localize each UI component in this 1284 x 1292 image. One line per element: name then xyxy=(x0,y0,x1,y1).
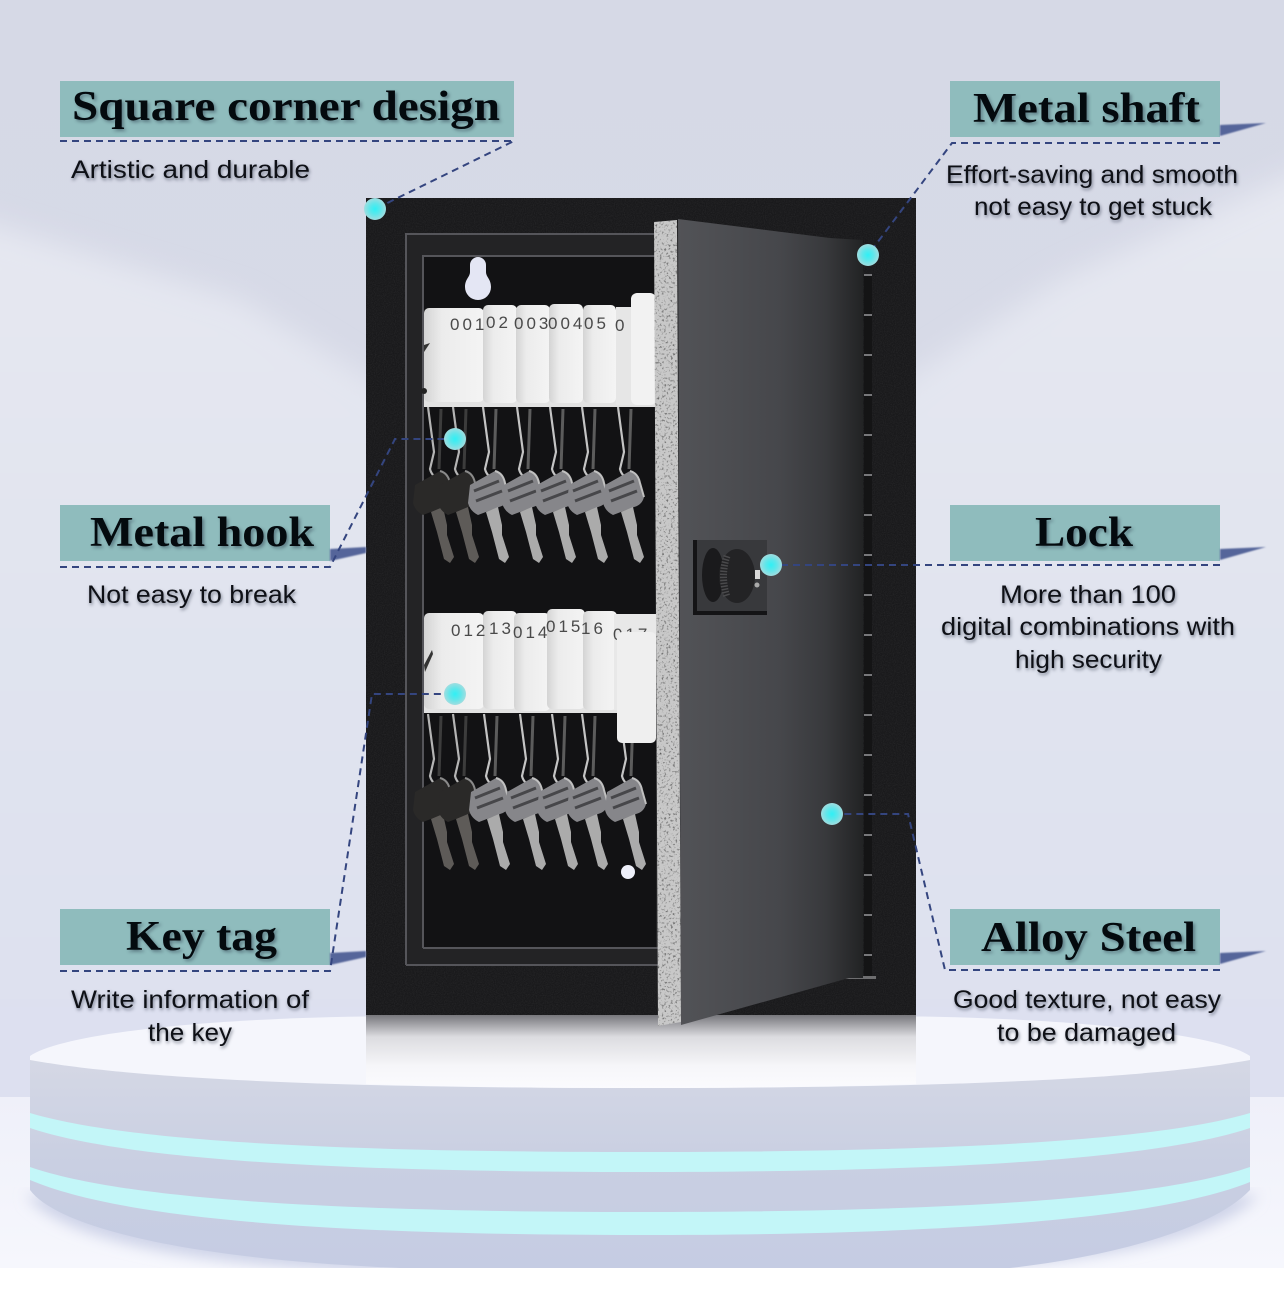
upper key tags: 001 xyxy=(450,315,487,334)
door panel xyxy=(678,219,863,1025)
upper key row xyxy=(413,407,644,563)
lower key tags: 012 xyxy=(451,621,488,640)
callout: Square corner design: Square corner design xyxy=(72,84,500,130)
white screw dot xyxy=(621,865,635,879)
lower key row xyxy=(413,714,646,870)
callout: Key tag: the key xyxy=(148,1019,233,1047)
upper key tags: 003 xyxy=(514,314,551,333)
callout: Metal hook xyxy=(60,428,466,609)
upper key tags: 0 xyxy=(615,316,627,335)
callout: Lock: Lock xyxy=(1035,510,1134,556)
callout: Alloy Steel: Alloy Steel xyxy=(981,915,1196,961)
cabinet body xyxy=(366,198,916,1015)
upper key tags xyxy=(421,293,656,407)
callout: Metal shaft: Effort-saving and smooth xyxy=(946,161,1238,189)
callout: Lock: More than 100 xyxy=(1000,581,1176,609)
callout: Alloy Steel xyxy=(821,803,1266,1047)
upper key tags: 004 xyxy=(548,314,585,333)
interior xyxy=(424,257,656,947)
callout: Key tag xyxy=(60,683,466,1047)
lower key tags: 13 xyxy=(489,619,514,638)
hinge strip xyxy=(830,274,876,979)
lock xyxy=(693,540,767,613)
callout: Square corner design xyxy=(60,81,514,220)
callout: Metal shaft: Metal shaft xyxy=(973,86,1200,132)
lower key tags: 16 xyxy=(581,619,606,638)
lower key tags: 015 xyxy=(546,617,583,636)
upper key tags: 02 xyxy=(486,313,511,332)
lower key tags: 014 xyxy=(513,623,550,642)
callout: Key tag: Write information of xyxy=(71,986,309,1014)
callout: Lock: digital combinations with xyxy=(941,613,1235,641)
callout: Lock: high security xyxy=(1015,646,1163,674)
callout: Metal shaft: not easy to get stuck xyxy=(974,193,1213,221)
keyhole xyxy=(465,257,491,300)
callout: Alloy Steel: to be damaged xyxy=(997,1019,1176,1047)
callout: Metal hook: Metal hook xyxy=(90,510,315,556)
callout: Key tag: Key tag xyxy=(126,914,277,960)
bottom white margin xyxy=(0,1268,1284,1292)
upper key tags: 05 xyxy=(584,314,609,333)
callout: Alloy Steel: Good texture, not easy xyxy=(953,986,1222,1014)
platform xyxy=(26,1015,1258,1272)
callout: Metal hook: Not easy to break xyxy=(87,581,297,609)
lower key tags xyxy=(424,609,656,743)
callout: Square corner design: Artistic and durable xyxy=(71,156,310,184)
cabinet xyxy=(366,198,916,1026)
callout: Lock xyxy=(760,505,1266,674)
callout: Metal shaft xyxy=(857,81,1266,266)
door textured edge xyxy=(654,220,681,1026)
lower key tags: 017 xyxy=(613,625,650,644)
